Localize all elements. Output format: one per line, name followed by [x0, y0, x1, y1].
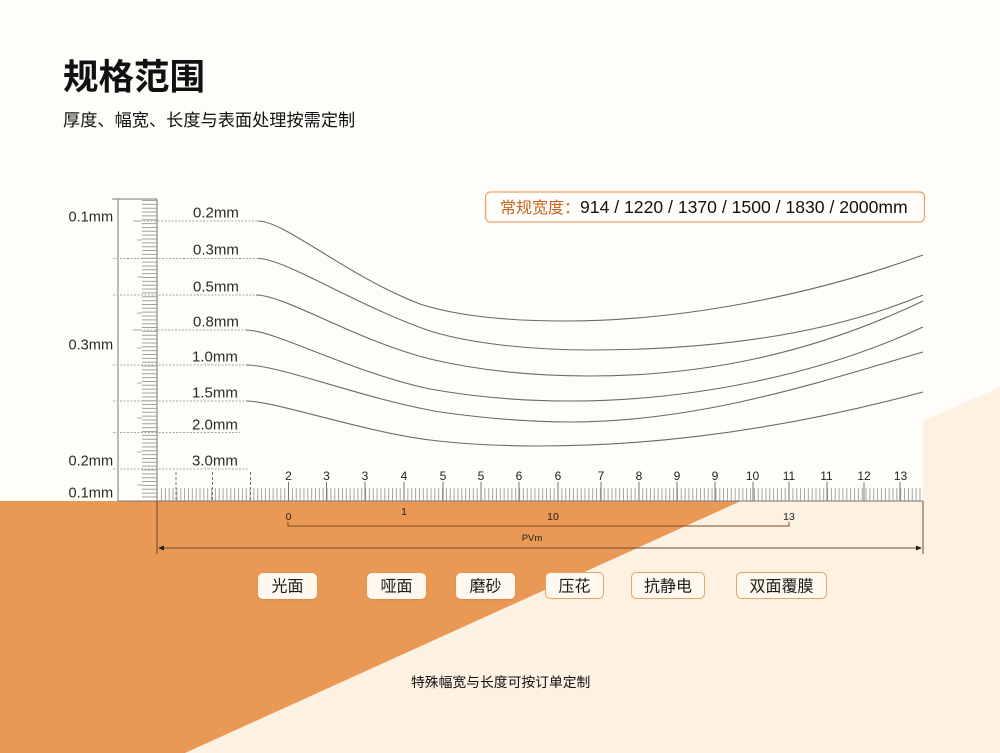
thickness labels: 3.0mm [192, 452, 238, 470]
ruler numbers: 5 [440, 469, 447, 483]
ruler side labels: 0.3mm [68, 338, 113, 354]
tag: 光面 [258, 573, 317, 599]
ruler numbers: 3 [362, 469, 369, 483]
tag: 磨砂: 磨砂 [469, 578, 502, 596]
thickness labels: 0.5mm [193, 278, 239, 296]
ruler side labels: 0.2mm [68, 454, 113, 470]
tag: 双面覆膜 [736, 572, 826, 598]
thickness curves [246, 221, 923, 446]
tag: 哑面: 哑面 [380, 578, 413, 596]
title: 规格范围 [63, 57, 205, 97]
ruler side labels [68, 210, 113, 502]
overall dimension arrow: PVm [522, 533, 542, 544]
tag: 哑面 [367, 573, 426, 599]
tag: 压花: 压花 [558, 578, 591, 596]
footnote: 特殊幅宽与长度可按订单定制 [411, 674, 590, 690]
ruler side labels: 0.1mm [68, 486, 113, 502]
ruler numbers: 7 [598, 469, 605, 483]
vertical thickness ruler [112, 199, 157, 501]
thickness labels: 2.0mm [192, 416, 238, 434]
tag: 双面覆膜: 双面覆膜 [749, 578, 814, 596]
thickness labels: 0.8mm [193, 314, 239, 330]
thickness labels: 1.0mm [192, 348, 238, 366]
ruler numbers [285, 469, 907, 483]
ruler numbers: 8 [636, 469, 643, 483]
ruler numbers: 11 [820, 469, 833, 483]
ruler numbers: 9 [712, 469, 719, 483]
ruler numbers: 6 [555, 469, 562, 483]
tag: 光面: 光面 [271, 578, 304, 596]
ruler numbers: 2 [285, 469, 292, 483]
ruler side labels: 0.1mm [68, 210, 113, 226]
ruler numbers: 4 [401, 469, 408, 483]
overall dimension arrow [157, 501, 923, 554]
background: peach corner shape [180, 387, 1000, 753]
ruler numbers: 6 [516, 469, 523, 483]
thickness labels: 1.5mm [192, 384, 238, 402]
ruler numbers: 9 [674, 469, 681, 483]
background: orange diagonal block [0, 501, 741, 753]
ruler numbers: 11 [783, 469, 796, 483]
ruler numbers: 5 [478, 469, 485, 483]
thickness labels: 0.3mm [193, 242, 239, 258]
width dimension bracket [286, 506, 795, 526]
tag: 抗静电: 抗静电 [644, 578, 692, 596]
thickness labels: 0.2mm [193, 204, 239, 222]
callout: regular widths: 常规宽度： [500, 199, 580, 217]
ruler numbers: 13 [894, 469, 907, 483]
ruler numbers: 12 [857, 469, 871, 483]
width dimension bracket: 10 [547, 511, 559, 523]
thickness labels [192, 204, 239, 470]
horizontal ruler [157, 472, 923, 501]
ruler numbers: 3 [323, 469, 330, 483]
tag: 压花 [546, 572, 604, 598]
width dimension bracket: 13 [783, 511, 795, 523]
subtitle: 厚度、幅宽、长度与表面处理按需定制 [63, 110, 355, 130]
width dimension bracket: 0 [286, 511, 292, 523]
tag: 抗静电 [632, 572, 704, 598]
callout: regular widths: 914 / 1220 / 1370 / 1500 / 1830 / 2000mm [580, 197, 908, 217]
thickness guide lines [113, 221, 258, 469]
width dimension bracket: 1 [401, 506, 407, 518]
callout: regular widths [486, 192, 924, 222]
tag: 磨砂 [456, 573, 515, 599]
ruler numbers: 10 [746, 469, 759, 483]
